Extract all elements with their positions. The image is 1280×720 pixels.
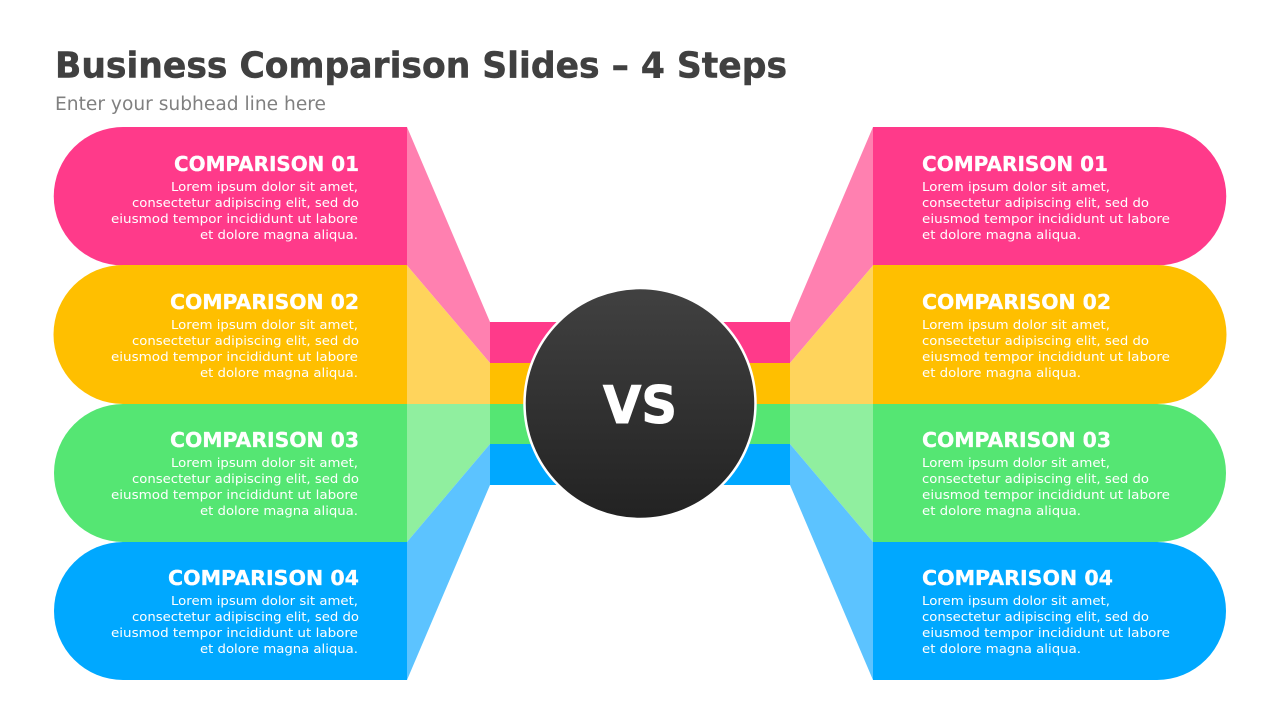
panel: left comparison 01: et dolore magna aliqua.: [200, 227, 358, 242]
panel: right comparison 02: Lorem ipsum dolor sit amet,: [922, 317, 1110, 332]
panel: left comparison 04: COMPARISON 04: [168, 566, 359, 590]
subhead: Enter your subhead line here: [55, 94, 326, 115]
panel: left comparison 04: consectetur adipiscing elit, sed do: [132, 609, 359, 624]
panel: left comparison 01: COMPARISON 01: [174, 152, 359, 176]
panel: left comparison 01: [54, 127, 490, 363]
panel: left comparison 04: Lorem ipsum dolor sit amet,: [171, 593, 358, 608]
panel: left comparison 04: et dolore magna aliqua.: [200, 641, 358, 656]
center VS badge: VS: [603, 376, 677, 436]
panel: right comparison 03: [790, 404, 1226, 542]
panel: right comparison 02: consectetur adipiscing elit, sed do: [922, 333, 1149, 348]
center connector bands: [490, 322, 790, 485]
panel: right comparison 01: [790, 127, 1226, 363]
panel: left comparison 03: et dolore magna aliqua.: [200, 503, 358, 518]
panel: right comparison 03: COMPARISON 03: [922, 428, 1111, 452]
title: Business Comparison Slides – 4 Steps: [55, 46, 787, 86]
panel: left comparison 03: Lorem ipsum dolor sit amet,: [171, 455, 358, 470]
panel: right comparison 01: Lorem ipsum dolor sit amet,: [922, 179, 1110, 194]
panel: right comparison 03: et dolore magna aliqua.: [922, 503, 1081, 518]
panel: right comparison 01: COMPARISON 01: [922, 152, 1108, 176]
panel: left comparison 02: eiusmod tempor incididunt ut labore: [111, 349, 358, 364]
panel: left comparison 01: consectetur adipiscing elit, sed do: [132, 195, 359, 210]
panel: right comparison 03: Lorem ipsum dolor sit amet,: [922, 455, 1110, 470]
panel: left comparison 03: consectetur adipiscing elit, sed do: [132, 471, 359, 486]
panel: left comparison 02: et dolore magna aliqua.: [200, 365, 358, 380]
panel: right comparison 04: Lorem ipsum dolor sit amet,: [922, 593, 1110, 608]
panel: right comparison 03: consectetur adipiscing elit, sed do: [922, 471, 1149, 486]
panel: left comparison 02: Lorem ipsum dolor sit amet,: [171, 317, 358, 332]
panel: right comparison 02: COMPARISON 02: [922, 290, 1111, 314]
center VS badge: [524, 288, 756, 519]
panel: right comparison 04: [790, 444, 1226, 680]
panel: right comparison 01: et dolore magna aliqua.: [922, 227, 1081, 242]
panel: left comparison 02: consectetur adipiscing elit, sed do: [132, 333, 359, 348]
panel: right comparison 02: [790, 265, 1226, 404]
panel: left comparison 02: COMPARISON 02: [170, 290, 359, 314]
panel: right comparison 04: et dolore magna aliqua.: [922, 641, 1081, 656]
panel: right comparison 04: COMPARISON 04: [922, 566, 1113, 590]
panel: right comparison 04: consectetur adipiscing elit, sed do: [922, 609, 1149, 624]
panel: left comparison 03: eiusmod tempor incididunt ut labore: [111, 487, 358, 502]
panel: right comparison 01: eiusmod tempor incididunt ut labore: [922, 211, 1170, 226]
panel: left comparison 04: eiusmod tempor incididunt ut labore: [111, 625, 358, 640]
panel: right comparison 03: eiusmod tempor incididunt ut labore: [922, 487, 1170, 502]
panel: left comparison 03: COMPARISON 03: [170, 428, 359, 452]
panel: right comparison 02: et dolore magna aliqua.: [922, 365, 1081, 380]
panel: left comparison 04: [54, 444, 490, 680]
panel: right comparison 04: eiusmod tempor incididunt ut labore: [922, 625, 1170, 640]
panel: left comparison 01: eiusmod tempor incididunt ut labore: [111, 211, 358, 226]
panel: right comparison 01: consectetur adipiscing elit, sed do: [922, 195, 1149, 210]
panel: left comparison 02: [54, 265, 490, 404]
panel: right comparison 02: eiusmod tempor incididunt ut labore: [922, 349, 1170, 364]
panel: left comparison 01: Lorem ipsum dolor sit amet,: [171, 179, 358, 194]
panel: left comparison 03: [54, 404, 490, 542]
